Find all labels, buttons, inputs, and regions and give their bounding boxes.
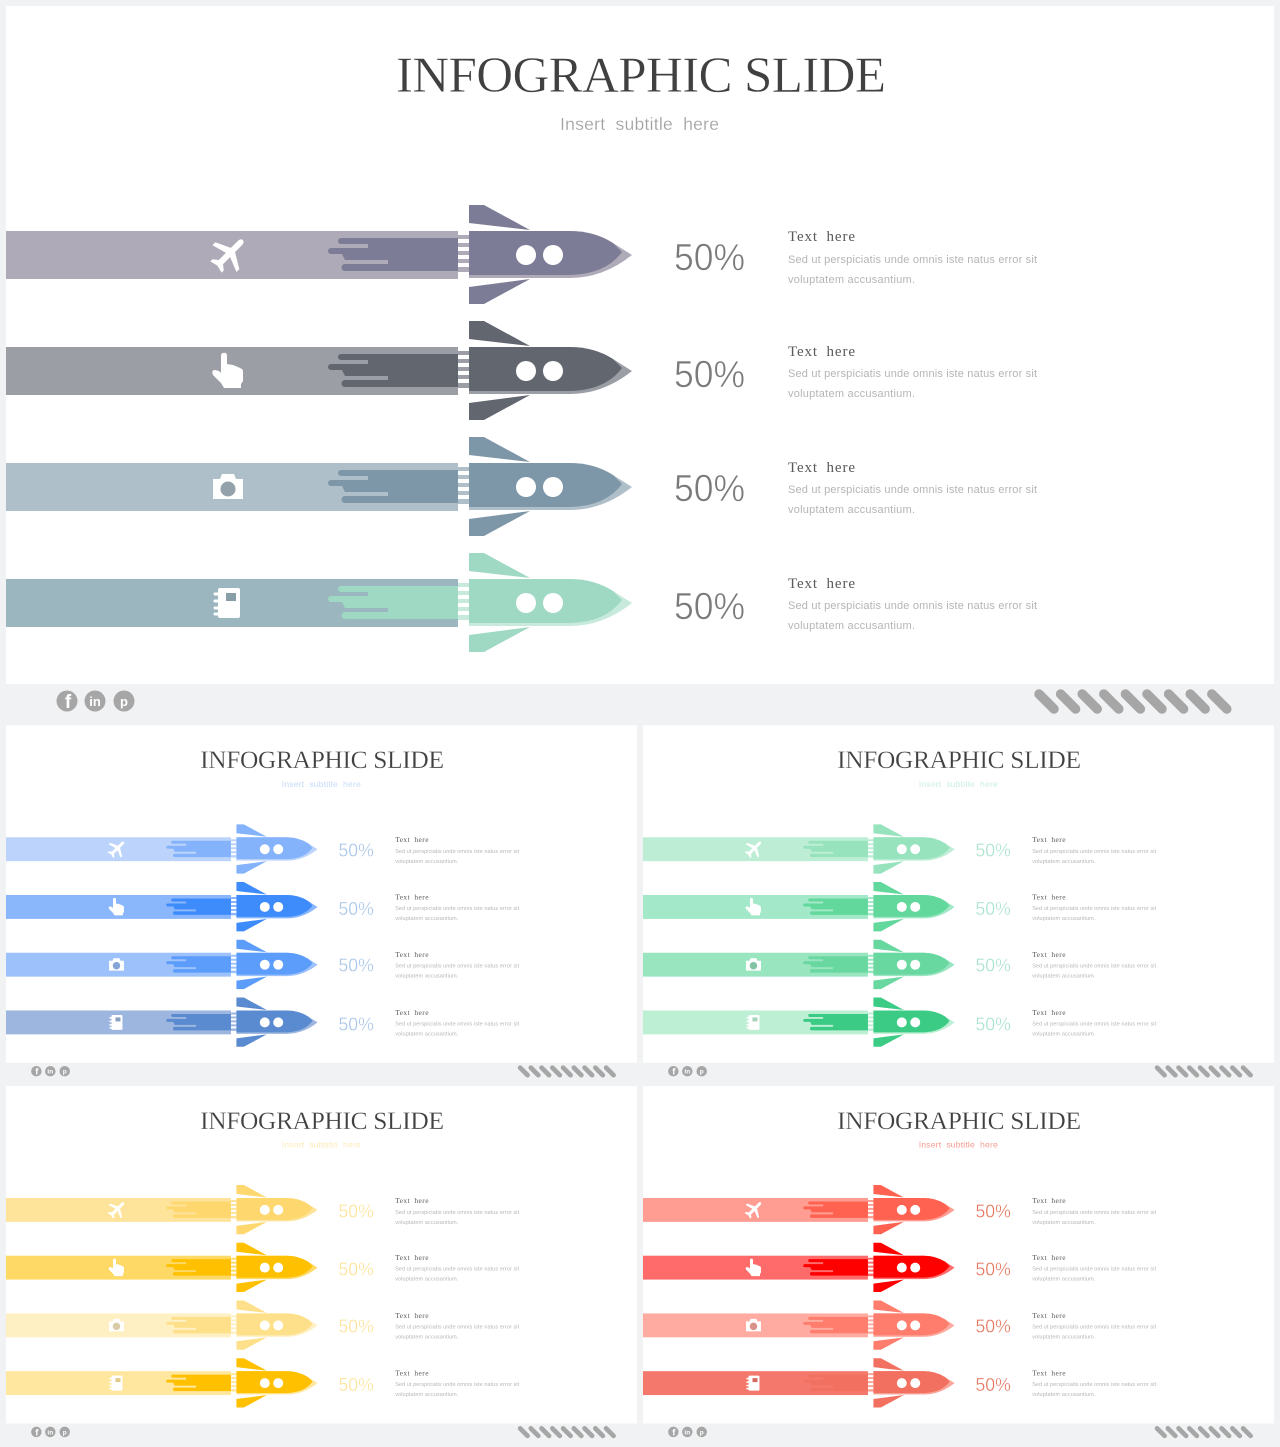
icon: camera <box>109 1319 124 1331</box>
row 4 <box>6 1358 520 1408</box>
slide background <box>6 725 637 1063</box>
icon: notebook <box>215 588 240 618</box>
description line 1: Sed ut perspiciatis unde omnis iste natus error sit <box>788 600 1037 612</box>
row 3 <box>6 940 520 989</box>
title: INFOGRAPHIC SLIDE <box>837 1107 1081 1135</box>
social icons: f <box>35 1427 39 1438</box>
icon: camera <box>109 958 124 971</box>
rocket <box>643 998 955 1047</box>
title: INFOGRAPHIC SLIDE <box>837 746 1081 774</box>
social icons: p <box>63 1069 67 1076</box>
description line 2: voluptatem accusantium. <box>395 1334 459 1340</box>
rocket <box>643 824 955 874</box>
description line 1: Sed ut perspiciatis unde omnis iste natus error sit <box>395 1210 520 1216</box>
label: Text here <box>788 229 855 245</box>
description line 2: voluptatem accusantium. <box>395 1220 459 1226</box>
icon: hand <box>109 1259 124 1276</box>
subtitle: Insert subtitle here <box>282 779 361 789</box>
rocket <box>6 553 632 652</box>
slide background <box>643 725 1274 1063</box>
label: Text here <box>1032 892 1066 901</box>
percentage: 50% <box>975 1316 1011 1337</box>
social icons: f <box>35 1067 39 1078</box>
footer stripes <box>520 1068 614 1075</box>
description line 1: Sed ut perspiciatis unde omnis iste natus error sit <box>1032 1021 1157 1027</box>
subtitle: Insert subtitle here <box>919 779 998 789</box>
subtitle: Insert subtitle here <box>282 1140 361 1150</box>
description line 1: Sed ut perspiciatis unde omnis iste natus error sit <box>1032 1382 1157 1388</box>
percentage: 50% <box>975 1014 1011 1035</box>
title: INFOGRAPHIC SLIDE <box>200 746 444 774</box>
row 4 <box>6 553 1037 652</box>
description line 1: Sed ut perspiciatis unde omnis iste natus error sit <box>395 964 520 970</box>
label: Text here <box>1032 950 1066 959</box>
social icons: in <box>89 694 101 709</box>
percentage: 50% <box>338 1316 374 1337</box>
social icons: in <box>47 1429 53 1436</box>
panel: blue theme slide <box>6 725 637 1078</box>
rocket <box>6 940 318 989</box>
social icons: f <box>672 1427 676 1438</box>
social icons <box>31 1066 70 1078</box>
description line 2: voluptatem accusantium. <box>395 1277 459 1283</box>
social icons: in <box>684 1069 690 1076</box>
icon: notebook <box>110 1376 122 1391</box>
description line 1: Sed ut perspiciatis unde omnis iste natus error sit <box>395 1382 520 1388</box>
description line 2: voluptatem accusantium. <box>1032 916 1096 922</box>
description line 1: Sed ut perspiciatis unde omnis iste natus error sit <box>788 254 1037 266</box>
icon: notebook <box>747 1376 759 1391</box>
description line 2: voluptatem accusantium. <box>395 1031 459 1037</box>
social icons <box>668 1427 707 1438</box>
label: Text here <box>395 1369 429 1378</box>
description line 2: voluptatem accusantium. <box>1032 1031 1096 1037</box>
row 2 <box>643 1243 1157 1292</box>
description line 1: Sed ut perspiciatis unde omnis iste natus error sit <box>1032 1324 1157 1330</box>
percentage: 50% <box>338 1014 374 1035</box>
label: Text here <box>395 1196 429 1205</box>
row 1 <box>643 824 1157 874</box>
footer stripes <box>520 1428 614 1436</box>
label: Text here <box>395 835 429 844</box>
rocket <box>6 998 318 1047</box>
rocket <box>6 1300 318 1350</box>
description line 2: voluptatem accusantium. <box>1032 859 1096 865</box>
rocket <box>6 437 632 536</box>
label: Text here <box>1032 1311 1066 1320</box>
row 4 <box>643 1358 1157 1408</box>
percentage: 50% <box>338 841 374 862</box>
percentage: 50% <box>338 1260 374 1281</box>
description line 1: Sed ut perspiciatis unde omnis iste natus error sit <box>1032 964 1157 970</box>
rocket <box>6 205 632 304</box>
description line 2: voluptatem accusantium. <box>788 620 915 632</box>
description line 2: voluptatem accusantium. <box>395 974 459 980</box>
row 2 <box>643 882 1157 931</box>
footer stripes <box>1157 1428 1251 1436</box>
subtitle: Insert subtitle here <box>560 114 719 134</box>
rocket <box>6 1243 318 1292</box>
label: Text here <box>395 1253 429 1262</box>
label: Text here <box>1032 835 1066 844</box>
rocket <box>643 1300 955 1350</box>
percentage: 50% <box>975 899 1011 920</box>
label: Text here <box>395 1008 429 1017</box>
row 1 <box>6 1185 520 1234</box>
label: Text here <box>395 1311 429 1320</box>
label: Text here <box>395 950 429 959</box>
icon: camera <box>213 474 243 499</box>
row 1 <box>643 1185 1157 1234</box>
footer stripes <box>1039 694 1227 709</box>
percentage: 50% <box>338 956 374 977</box>
description line 1: Sed ut perspiciatis unde omnis iste natus error sit <box>1032 1210 1157 1216</box>
icon: hand <box>109 898 124 915</box>
icon: notebook <box>110 1015 122 1030</box>
rocket <box>6 1358 318 1408</box>
social icons: f <box>65 692 72 713</box>
panel: red theme slide <box>643 1086 1274 1438</box>
icon: plane <box>104 835 130 862</box>
rocket <box>643 940 955 989</box>
description line 2: voluptatem accusantium. <box>1032 1392 1096 1398</box>
description line 1: Sed ut perspiciatis unde omnis iste natus error sit <box>395 849 520 855</box>
description line 2: voluptatem accusantium. <box>788 504 915 516</box>
row 1 <box>6 205 1037 304</box>
social icons: p <box>120 694 128 709</box>
social icons <box>31 1427 70 1438</box>
rocket <box>643 1243 955 1292</box>
percentage: 50% <box>338 1201 374 1222</box>
description line 2: voluptatem accusantium. <box>1032 974 1096 980</box>
description line 1: Sed ut perspiciatis unde omnis iste natus error sit <box>395 1267 520 1273</box>
percentage: 50% <box>674 354 745 396</box>
percentage: 50% <box>338 1375 374 1396</box>
social icons: p <box>63 1429 67 1436</box>
description line 1: Sed ut perspiciatis unde omnis iste natus error sit <box>395 906 520 912</box>
label: Text here <box>788 344 855 360</box>
description line 1: Sed ut perspiciatis unde omnis iste natus error sit <box>395 1021 520 1027</box>
label: Text here <box>788 576 855 592</box>
rocket <box>643 1185 955 1234</box>
icon: camera <box>746 1319 761 1331</box>
icon: plane <box>741 1196 767 1222</box>
icon: plane <box>741 835 767 862</box>
description line 2: voluptatem accusantium. <box>395 859 459 865</box>
panel: main slide grey theme <box>6 6 1274 713</box>
rocket <box>643 1358 955 1408</box>
title: INFOGRAPHIC SLIDE <box>396 48 886 104</box>
label: Text here <box>1032 1196 1066 1205</box>
row 3 <box>643 940 1157 989</box>
percentage: 50% <box>975 1201 1011 1222</box>
description line 2: voluptatem accusantium. <box>1032 1220 1096 1226</box>
label: Text here <box>1032 1008 1066 1017</box>
row 2 <box>6 882 520 931</box>
row 4 <box>643 998 1157 1047</box>
description line 2: voluptatem accusantium. <box>395 1392 459 1398</box>
percentage: 50% <box>674 586 745 628</box>
description line 1: Sed ut perspiciatis unde omnis iste natus error sit <box>1032 849 1157 855</box>
slide background <box>6 6 1274 684</box>
description line 2: voluptatem accusantium. <box>1032 1334 1096 1340</box>
description line 1: Sed ut perspiciatis unde omnis iste natus error sit <box>788 368 1037 380</box>
footer stripes <box>1157 1068 1251 1075</box>
social icons: p <box>700 1429 704 1436</box>
description line 1: Sed ut perspiciatis unde omnis iste natus error sit <box>1032 1267 1157 1273</box>
social icons: in <box>47 1069 53 1076</box>
percentage: 50% <box>975 956 1011 977</box>
social icons: in <box>684 1429 690 1436</box>
label: Text here <box>395 892 429 901</box>
rocket <box>6 1185 318 1234</box>
percentage: 50% <box>975 841 1011 862</box>
social icons: p <box>700 1069 704 1076</box>
icon: plane <box>104 1196 130 1222</box>
row 2 <box>6 1243 520 1292</box>
percentage: 50% <box>975 1260 1011 1281</box>
label: Text here <box>788 460 855 476</box>
subtitle: Insert subtitle here <box>919 1140 998 1150</box>
social icons <box>56 690 134 713</box>
icon: hand <box>212 353 243 388</box>
row 2 <box>6 321 1037 420</box>
icon: hand <box>746 1259 761 1276</box>
row 4 <box>6 998 520 1047</box>
description line 1: Sed ut perspiciatis unde omnis iste natus error sit <box>1032 906 1157 912</box>
label: Text here <box>1032 1369 1066 1378</box>
percentage: 50% <box>674 237 745 279</box>
label: Text here <box>1032 1253 1066 1262</box>
social icons <box>668 1066 707 1078</box>
description line 2: voluptatem accusantium. <box>395 916 459 922</box>
row 1 <box>6 824 520 874</box>
description line 1: Sed ut perspiciatis unde omnis iste natus error sit <box>395 1324 520 1330</box>
percentage: 50% <box>338 899 374 920</box>
description line 2: voluptatem accusantium. <box>1032 1277 1096 1283</box>
percentage: 50% <box>975 1375 1011 1396</box>
description line 2: voluptatem accusantium. <box>788 388 915 400</box>
description line 2: voluptatem accusantium. <box>788 274 915 286</box>
panel: green theme slide <box>643 725 1274 1078</box>
rocket <box>6 882 318 931</box>
percentage: 50% <box>674 468 745 510</box>
icon: plane <box>203 227 256 280</box>
icon: notebook <box>747 1015 759 1030</box>
rocket <box>6 321 632 420</box>
icon: camera <box>746 958 761 971</box>
slide background <box>6 1086 637 1423</box>
description line 1: Sed ut perspiciatis unde omnis iste natus error sit <box>788 484 1037 496</box>
rocket <box>6 824 318 874</box>
icon: hand <box>746 898 761 915</box>
row 3 <box>643 1300 1157 1350</box>
rocket <box>643 882 955 931</box>
row 3 <box>6 437 1037 536</box>
row 3 <box>6 1300 520 1350</box>
panel: yellow theme slide <box>6 1086 637 1438</box>
slide background <box>643 1086 1274 1423</box>
title: INFOGRAPHIC SLIDE <box>200 1107 444 1135</box>
social icons: f <box>672 1067 676 1078</box>
